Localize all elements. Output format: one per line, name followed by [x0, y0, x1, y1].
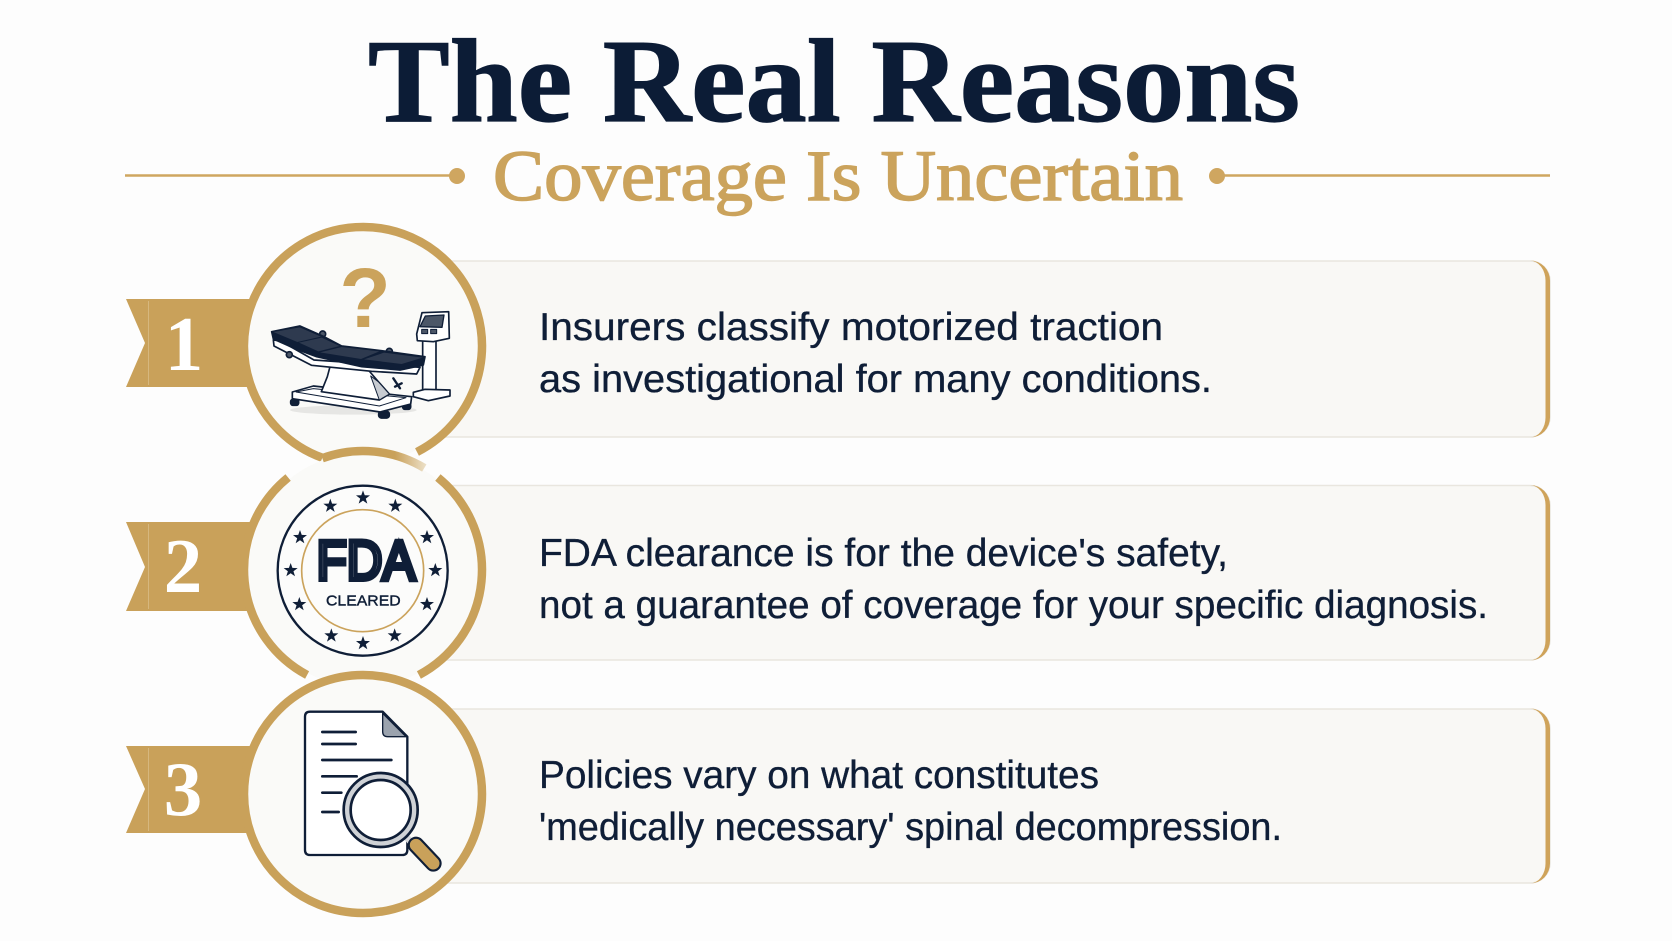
ribbon: number 3: 3: [164, 746, 202, 832]
ribbon: number 1: 1: [165, 301, 203, 387]
icon: document and magnifying glass: [305, 712, 433, 863]
ribbon: number 2: 2: [164, 523, 202, 609]
medallion 2: FDA cleared seal: [244, 451, 482, 687]
subtitle with divider lines: [125, 136, 1550, 216]
icon: traction table: [272, 312, 450, 418]
text: reason 1: as investigational for many conditions.: [539, 358, 1212, 401]
medallion 3: policy document with magnifier: [244, 675, 482, 913]
ribbon: number 2: [126, 522, 290, 611]
title: The Real Reasons: [368, 15, 1300, 147]
text: reason 2: FDA clearance is for the device's safety,: [539, 532, 1228, 575]
icon: FDA seal: CLEARED: [326, 593, 401, 610]
panel: reason 1 card: [400, 260, 1550, 438]
icon: FDA seal: FDA: [317, 530, 415, 592]
text: reason 3: Policies vary on what constitutes: [539, 754, 1099, 797]
text: reason 3: 'medically necessary' spinal decompression.: [539, 806, 1282, 849]
text: reason 2: [539, 532, 1488, 627]
panel: reason 3 card: [400, 708, 1550, 884]
subtitle with divider lines: Coverage Is Uncertain: [493, 136, 1183, 216]
icon: question mark: ?: [339, 251, 391, 345]
ribbon: number 3: [126, 746, 290, 833]
text: reason 2: not a guarantee of coverage for your specific diagnosis.: [539, 584, 1488, 627]
ribbon: number 1: [126, 299, 290, 387]
icon: FDA seal: [278, 486, 448, 656]
text: reason 1: [539, 306, 1212, 401]
text: reason 1: Insurers classify motorized traction: [539, 306, 1163, 349]
panel: reason 2 card: [400, 485, 1550, 660]
medallion 1: traction table with question mark: [244, 227, 482, 463]
text: reason 3: [539, 754, 1282, 849]
